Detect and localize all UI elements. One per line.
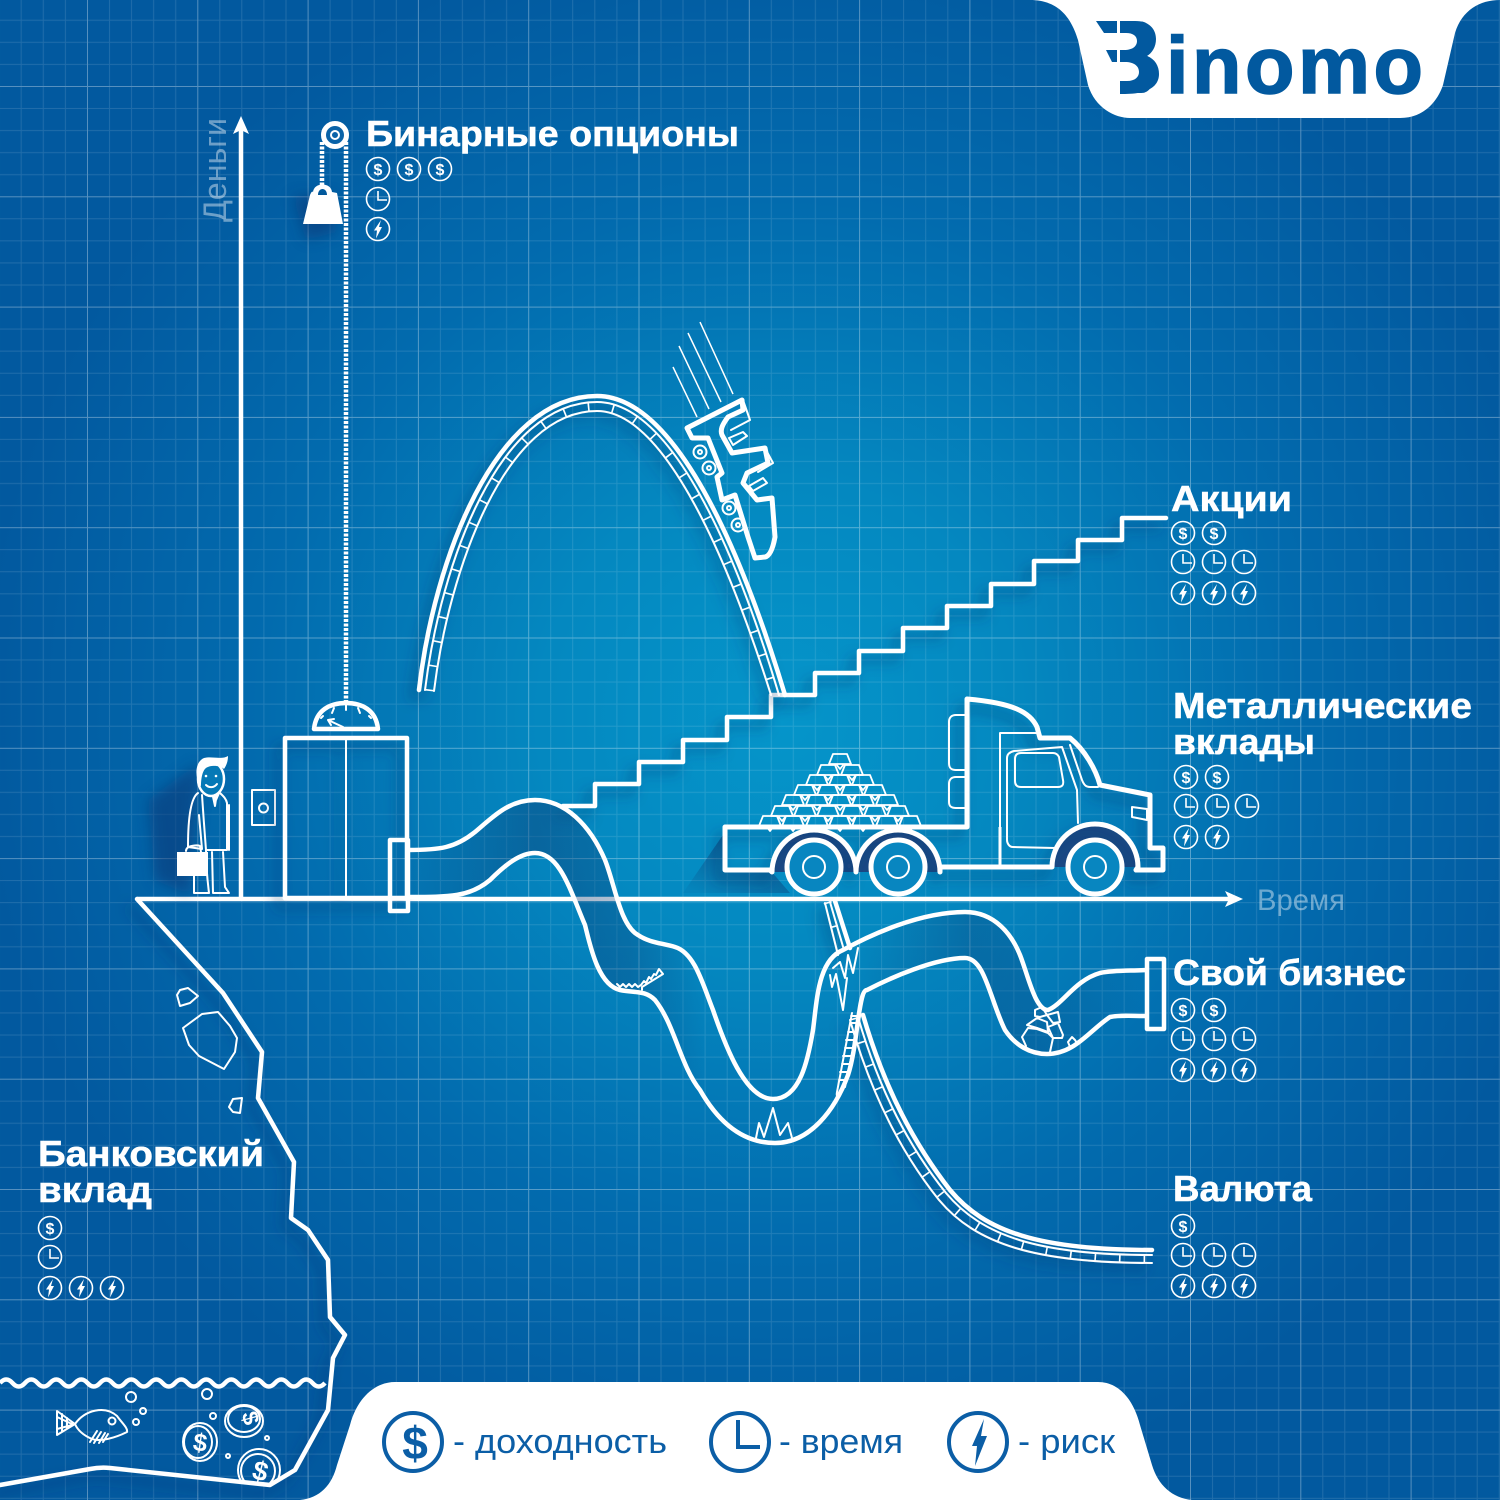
legend: time — [711, 1413, 903, 1471]
block: metal deposits: Металлические — [1173, 685, 1472, 726]
block: own business — [1172, 952, 1406, 1082]
block: bank deposit — [38, 1133, 264, 1300]
logo wordmark: inomo — [1166, 21, 1423, 111]
coins: $ — [249, 1455, 271, 1488]
tube spikes — [756, 1108, 792, 1138]
block: binary options: $ — [405, 162, 414, 179]
block: stocks — [1171, 478, 1292, 604]
logo wordmark: B — [1122, 0, 1156, 116]
block: own business: $ — [1210, 1003, 1219, 1020]
axis label: time: Время — [1257, 884, 1345, 917]
axis label: money: Деньги — [197, 118, 233, 222]
roller coaster arch — [419, 396, 785, 695]
coins: $ — [237, 1408, 265, 1428]
legend: time: - время — [779, 1423, 903, 1461]
block: own business: Свой бизнес — [1173, 952, 1406, 993]
fish — [57, 1410, 127, 1443]
block: binary options — [366, 113, 739, 240]
dial gauge — [314, 703, 378, 729]
block: own business: $ — [1179, 1003, 1188, 1020]
coins — [183, 1405, 280, 1491]
block: bank deposit: вклад — [38, 1169, 152, 1210]
water wave — [0, 1380, 325, 1386]
gold bars pyramid — [759, 754, 921, 831]
block: stocks: $ — [1210, 526, 1219, 543]
axes — [137, 116, 1243, 907]
block: binary options: $ — [436, 162, 445, 179]
tube crack — [830, 948, 858, 1010]
elevator button panel — [252, 790, 275, 825]
block: metal deposits: $ — [1213, 770, 1222, 787]
saw — [617, 969, 663, 990]
legend: risk: - риск — [1018, 1423, 1116, 1461]
legend: yield: $ — [402, 1417, 428, 1469]
block: stocks: Акции — [1171, 478, 1292, 519]
falling coaster car — [673, 322, 775, 558]
block: metal deposits: $ — [1182, 770, 1191, 787]
block: stocks: $ — [1179, 526, 1188, 543]
block: binary options: $ — [374, 162, 383, 179]
coins: $ — [191, 1428, 209, 1458]
block: currency: $ — [1179, 1219, 1188, 1236]
block: currency — [1172, 1168, 1313, 1298]
logo panel — [1030, 0, 1500, 118]
legend: yield — [384, 1413, 667, 1471]
cliff — [0, 899, 345, 1485]
briefcase — [177, 852, 208, 876]
pulley and weight — [293, 124, 346, 702]
truck — [683, 699, 1163, 894]
legend: risk — [949, 1413, 1116, 1471]
bubbles — [126, 1389, 269, 1458]
wheel arch shading — [772, 824, 1138, 872]
block: bank deposit: Банковский — [38, 1133, 264, 1174]
truck wheels — [787, 840, 1122, 894]
rock pile — [1022, 1007, 1077, 1052]
person — [148, 756, 229, 895]
coaster rail down — [825, 901, 1152, 1263]
legend panel — [300, 1382, 1192, 1500]
staircase — [563, 518, 1166, 806]
cliff rocks — [177, 988, 242, 1113]
block: binary options: Бинарные опционы — [366, 113, 739, 154]
block: metal deposits: вклады — [1173, 721, 1315, 762]
logo wordmark — [1096, 0, 1423, 116]
block: currency: Валюта — [1173, 1168, 1313, 1209]
elevator — [285, 738, 407, 898]
tube — [390, 800, 1164, 1143]
ladder — [837, 1013, 860, 1096]
block: bank deposit: $ — [46, 1221, 55, 1238]
block: metal deposits — [1173, 685, 1472, 848]
legend: yield: - доходность — [453, 1423, 667, 1461]
cab details — [949, 715, 1147, 848]
